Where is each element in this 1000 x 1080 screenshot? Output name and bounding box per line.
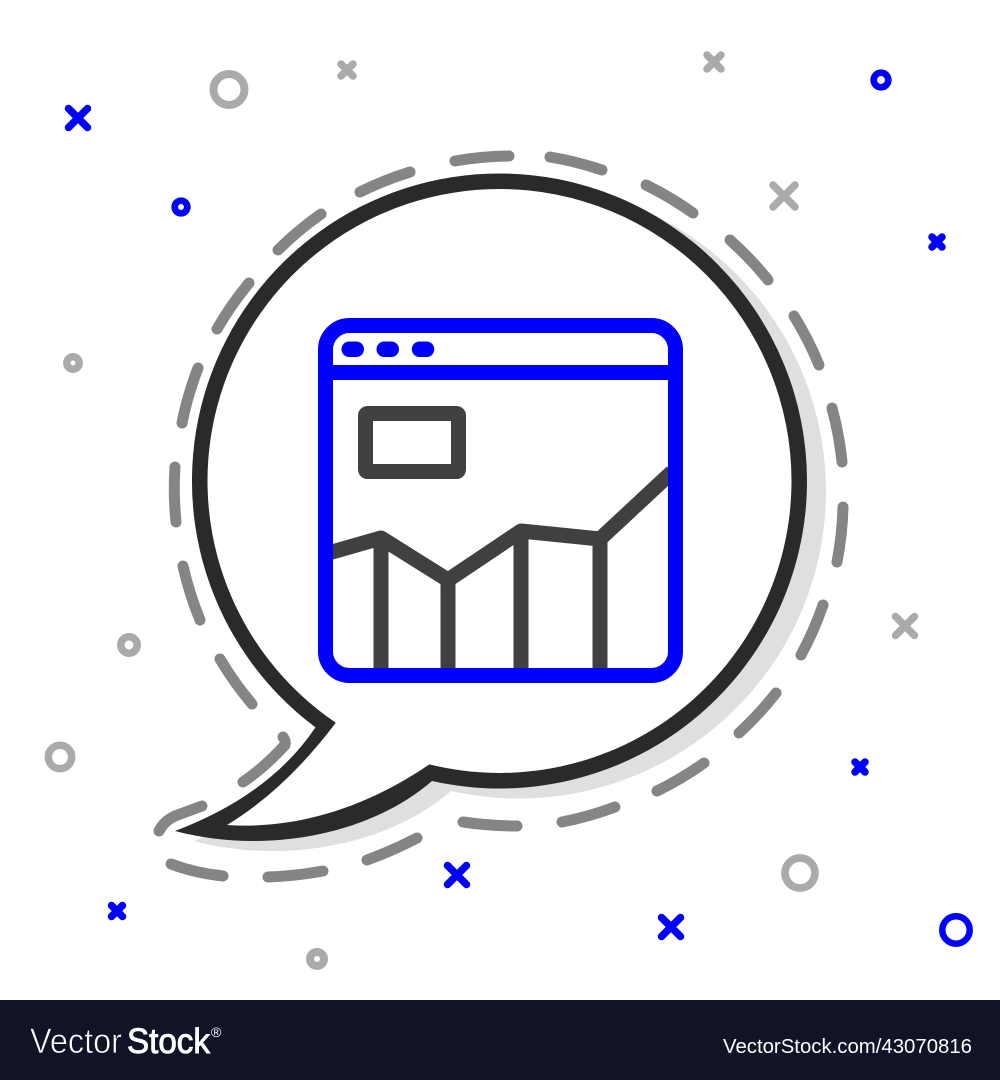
bubble interior bbox=[207, 189, 792, 826]
brand logo text: Vector bbox=[30, 1022, 122, 1061]
speech bubble bbox=[175, 174, 826, 851]
icon: browser window with chart bbox=[325, 326, 676, 676]
decorative gray rings bbox=[48, 74, 815, 966]
decorative gray crosses bbox=[341, 55, 914, 636]
footer bar bbox=[0, 1000, 1000, 1080]
decorative blue rings bbox=[175, 73, 970, 944]
bubble shadow bbox=[194, 184, 826, 851]
window frame bbox=[326, 326, 676, 676]
brand logo text: Stock bbox=[127, 1022, 210, 1061]
chart line and columns bbox=[325, 472, 672, 672]
bubble outline bbox=[175, 174, 807, 841]
dashed outline around bubble bbox=[159, 156, 843, 877]
brand logo text: ® bbox=[211, 1024, 222, 1040]
window control dots bbox=[342, 342, 434, 357]
image id text: VectorStock.com/43070816 bbox=[723, 1036, 972, 1058]
decorative blue crosses bbox=[68, 108, 942, 936]
content placeholder box bbox=[366, 414, 458, 472]
title bar divider bbox=[326, 365, 675, 380]
